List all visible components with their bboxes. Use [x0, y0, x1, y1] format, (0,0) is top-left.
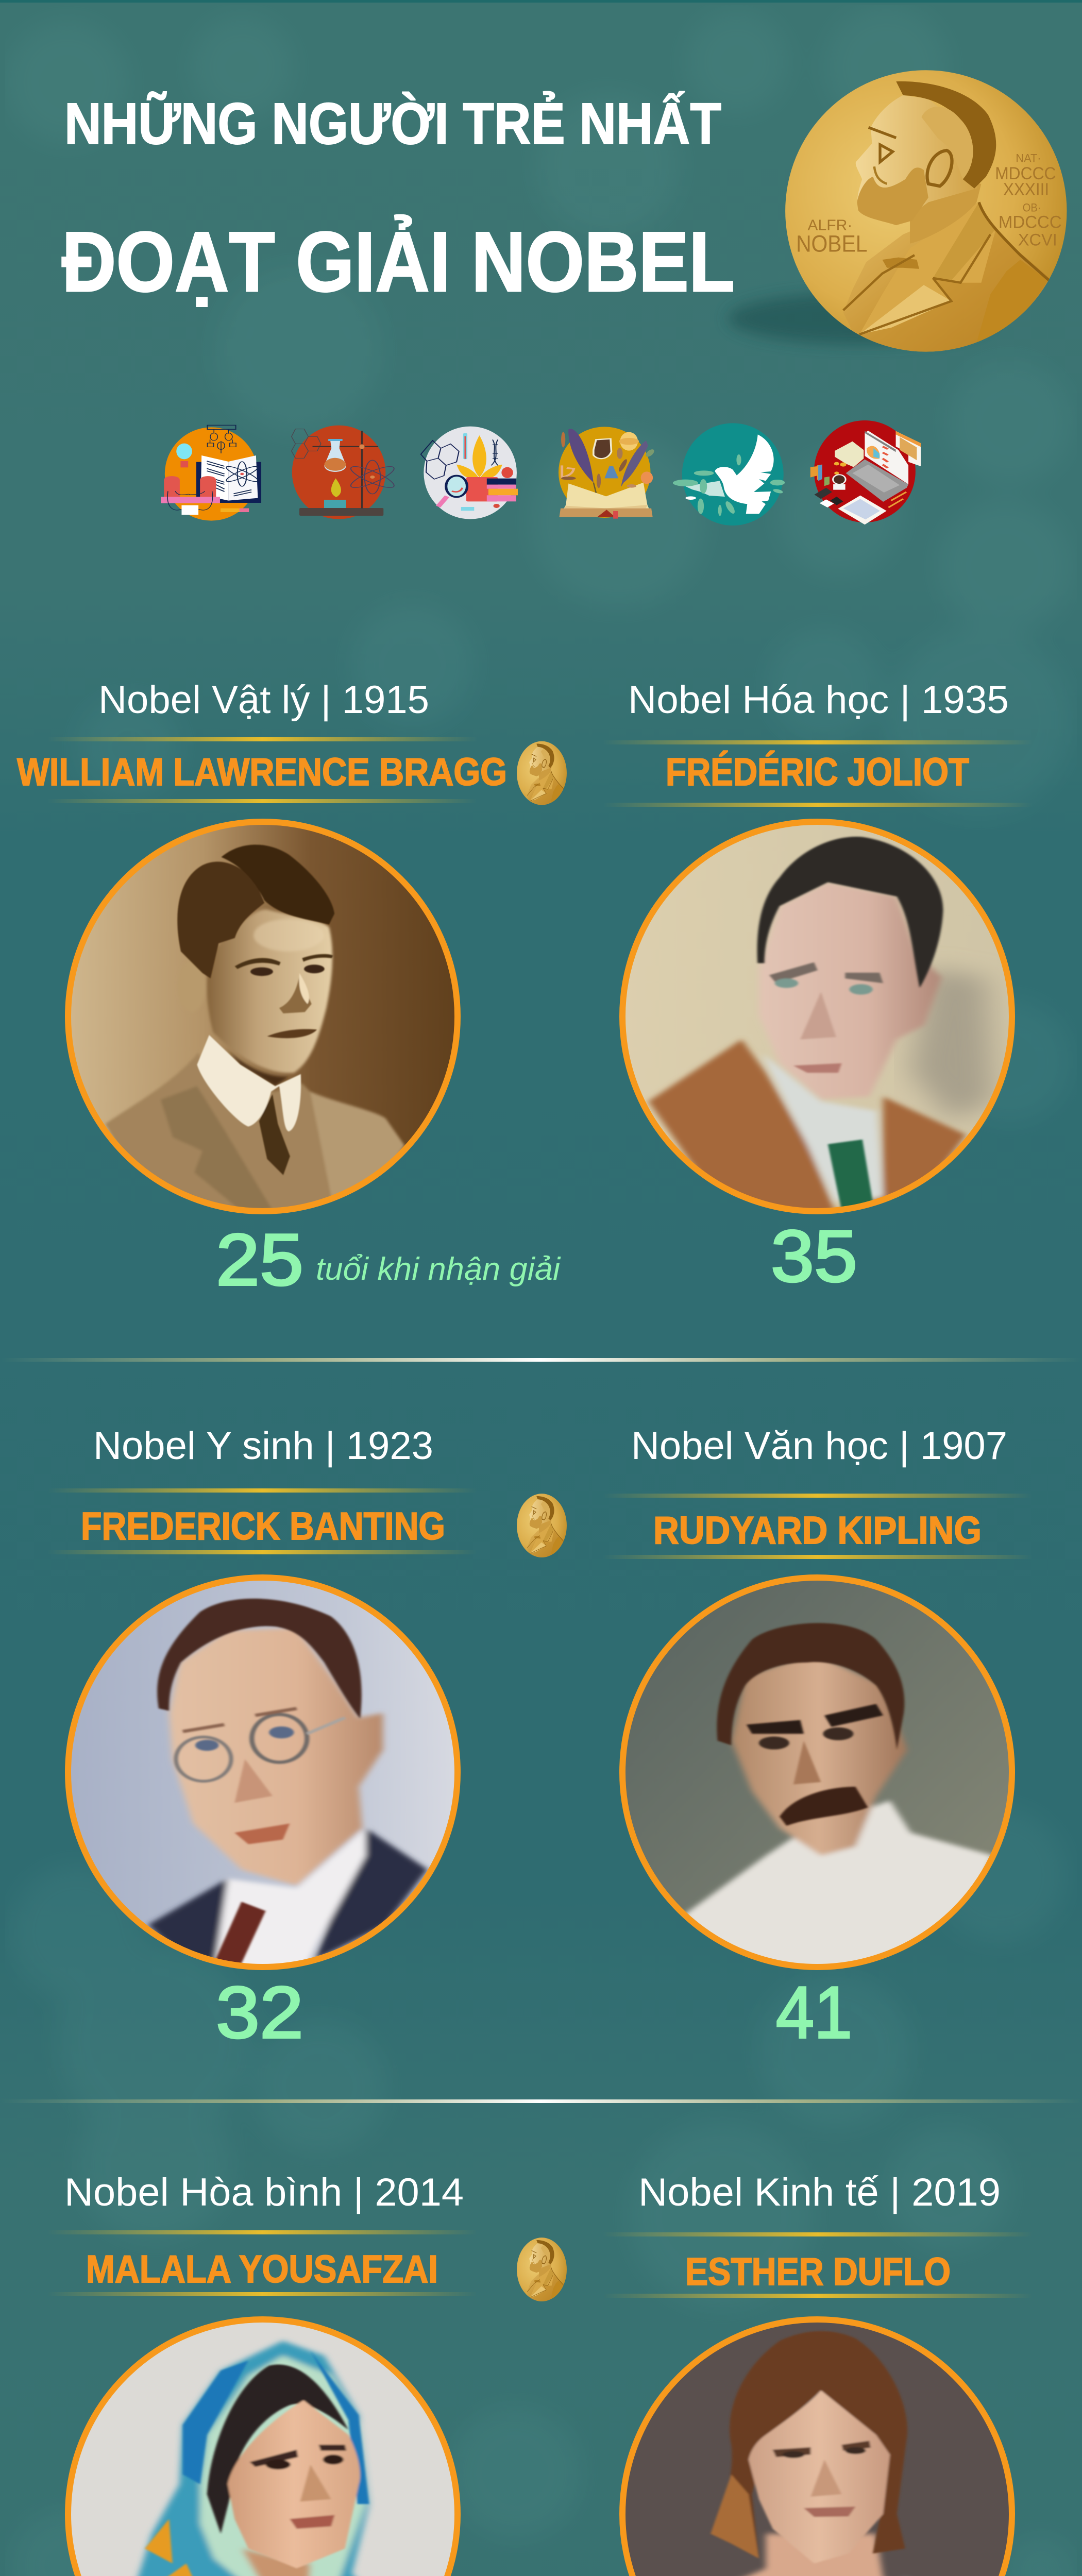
title line 2: ĐOẠT GIẢI NOBEL	[62, 214, 735, 309]
name: ESTHER DUFLO	[685, 2250, 951, 2293]
panel: chemistry, Joliot	[603, 678, 1033, 1297]
prize label: Nobel Y sinh | 1923	[93, 1424, 433, 1468]
medal inscription: ALFR·	[807, 217, 852, 234]
name: MALALA YOUSAFZAI	[86, 2247, 438, 2291]
icon: literature	[559, 427, 656, 519]
age number: 41	[776, 1972, 852, 2054]
portrait	[616, 1572, 1018, 1980]
medal inscription	[796, 151, 1062, 257]
panel: literature, Kipling	[603, 1424, 1033, 2054]
icon: small medal	[517, 741, 567, 807]
title	[62, 91, 735, 309]
medal inscription: NOBEL	[796, 230, 867, 257]
prize label: Nobel Kinh tế | 2019	[638, 2171, 1001, 2214]
medal inscription: NAT·	[1016, 151, 1041, 164]
panel: physics, Bragg	[17, 678, 567, 1301]
portrait	[62, 1572, 464, 1980]
icon: peace dove	[673, 423, 785, 526]
icon: Nobel medal	[785, 70, 1067, 363]
prize label: Nobel Văn học | 1907	[631, 1424, 1007, 1468]
panel: medicine, Banting	[47, 1424, 567, 2054]
medal inscription: XXXIII	[1003, 180, 1049, 199]
name: WILLIAM LAWRENCE BRAGG	[17, 750, 507, 793]
icon: medicine	[421, 427, 518, 519]
medal inscription: MDCCC	[995, 164, 1056, 183]
panel: economics, Duflo	[603, 2171, 1033, 2576]
age number: 35	[771, 1215, 857, 1297]
name: FREDERICK BANTING	[81, 1504, 445, 1548]
portrait	[62, 2314, 464, 2576]
medal inscription: MDCCC	[999, 212, 1062, 232]
medal inscription: OB·	[1023, 201, 1041, 214]
age number: 32	[216, 1972, 303, 2054]
title line 1: NHỮNG NGƯỜI TRẺ NHẤT	[64, 91, 721, 156]
icon: economics	[810, 420, 921, 524]
prize label: Nobel Vật lý | 1915	[98, 678, 429, 722]
panel: peace, Malala	[47, 2171, 567, 2576]
icon: physics	[161, 425, 261, 521]
medal shadow	[728, 293, 991, 344]
age caption: tuổi khi nhận giải	[316, 1251, 561, 1287]
prize label: Nobel Hòa bình | 2014	[64, 2171, 464, 2214]
portrait	[62, 817, 464, 1218]
portrait	[616, 2314, 1018, 2576]
portrait	[616, 817, 1018, 1225]
icon: chemistry	[292, 426, 398, 519]
top edge strip	[0, 0, 1082, 3]
category icons	[161, 420, 921, 526]
icon: small medal	[517, 2238, 567, 2304]
icon: small medal	[517, 1494, 567, 1560]
prize label: Nobel Hóa học | 1935	[628, 678, 1009, 722]
age number: 25	[216, 1219, 303, 1301]
name: RUDYARD KIPLING	[653, 1509, 982, 1552]
name: FRÉDÉRIC JOLIOT	[666, 750, 969, 793]
medal inscription: XCVI	[1018, 230, 1057, 249]
